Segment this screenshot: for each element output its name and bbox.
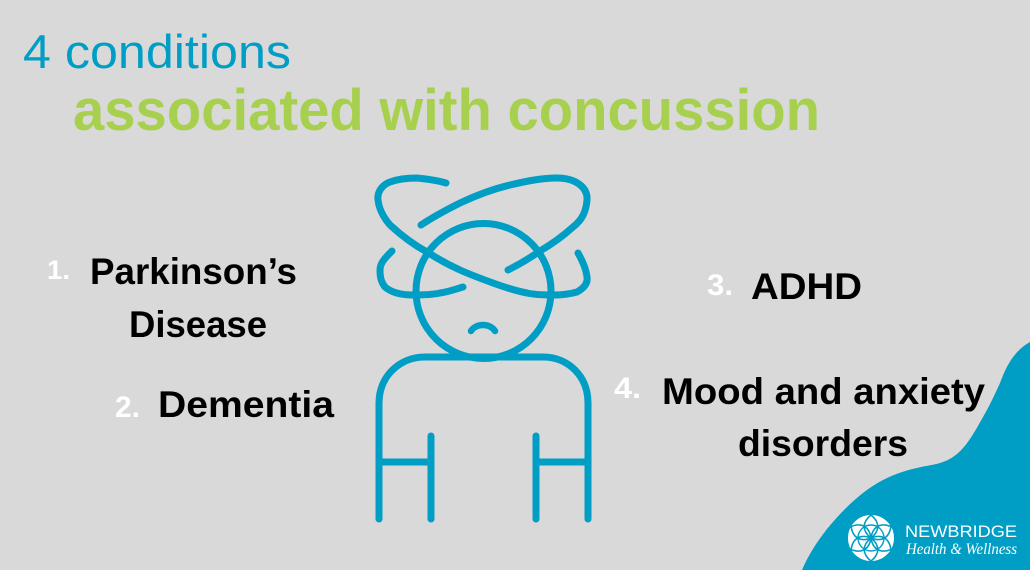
- item 3 number: 3.: [707, 269, 733, 302]
- item 4 label: [662, 371, 985, 464]
- item 1 label: Disease: [129, 304, 267, 345]
- title: 4 conditions: 4 conditions: [23, 25, 291, 78]
- body: [379, 357, 588, 519]
- title: associated with concussion: associated with concussion: [73, 78, 820, 143]
- sad mouth: [471, 325, 495, 331]
- item 4 label: Mood and anxiety: [662, 371, 985, 412]
- item 4 label: disorders: [738, 423, 908, 464]
- head: [416, 224, 551, 358]
- item 2 number: 2.: [115, 391, 140, 424]
- corner blob: [802, 342, 1030, 570]
- logo: tagline: Health & Wellness: [905, 541, 1017, 558]
- logo: flower mark: [848, 514, 894, 562]
- orbit: front ring: [421, 178, 587, 270]
- left arm: [379, 436, 431, 519]
- item 4 number: 4.: [614, 372, 641, 405]
- right arm: [536, 436, 588, 519]
- orbit: left ring tail: [380, 251, 463, 295]
- item 1 label: [90, 251, 297, 345]
- logo: wordmark: NEWBRIDGE: [905, 522, 1017, 541]
- orbit: back ring: [378, 178, 587, 295]
- item 1 label: Parkinson’s: [90, 251, 297, 292]
- icon: concussed person: [378, 178, 588, 519]
- item 2 label: Dementia: [158, 384, 334, 425]
- item 1 number: 1.: [47, 255, 70, 285]
- item 3 label: ADHD: [751, 266, 862, 307]
